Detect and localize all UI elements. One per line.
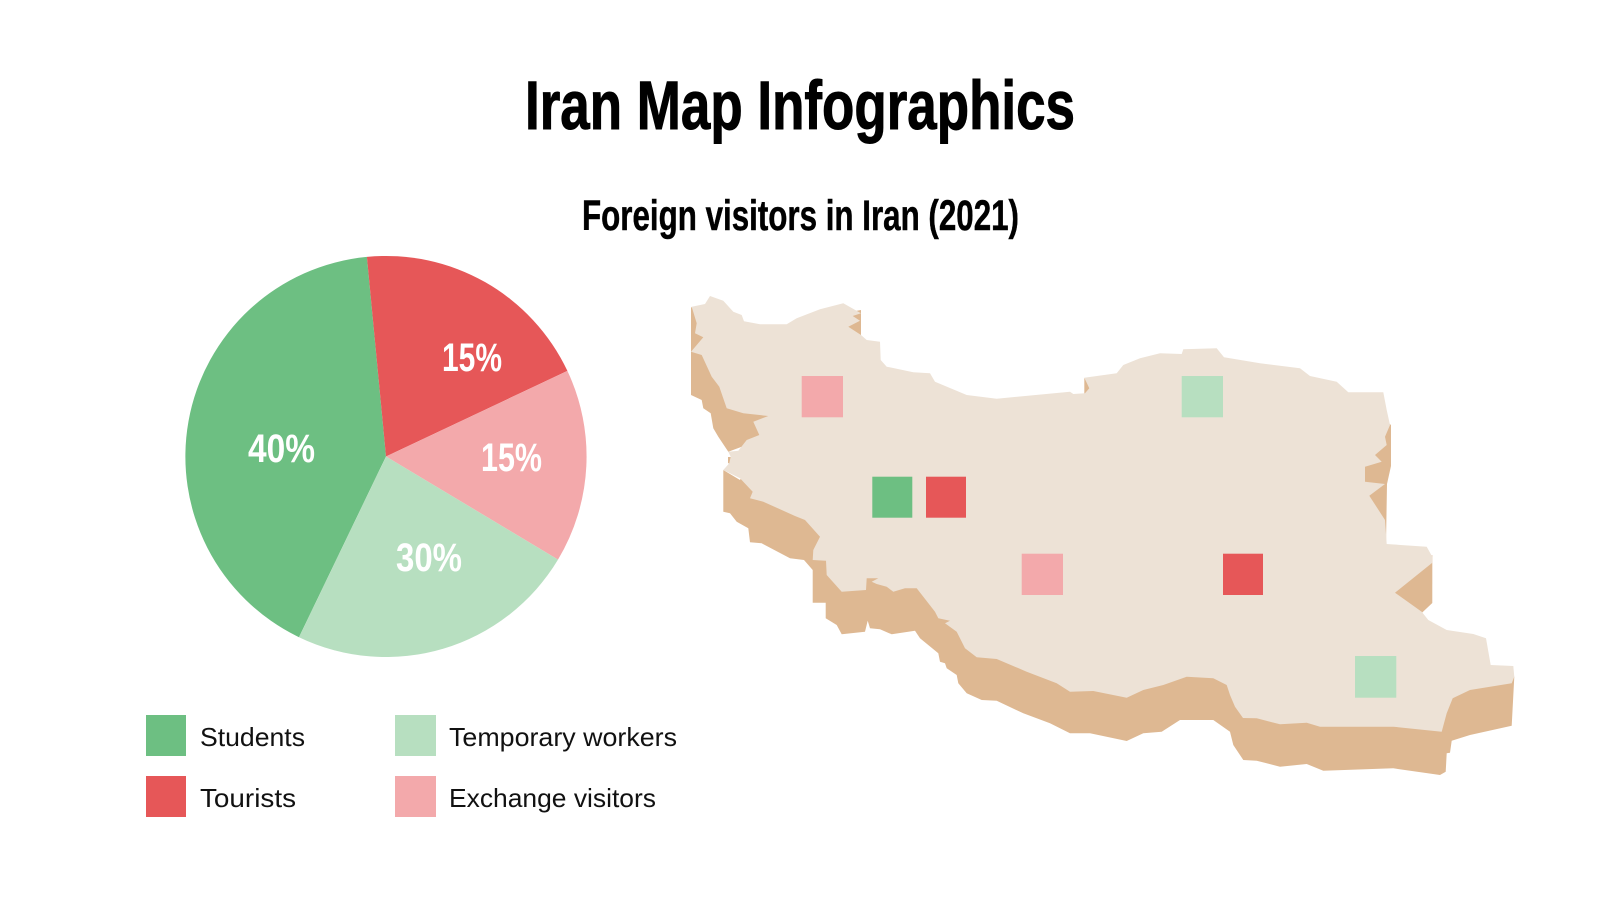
marker: temporary workers north — [1182, 376, 1223, 417]
marker: tourists east — [1223, 554, 1263, 595]
legend — [146, 715, 677, 817]
label: 40%: 40% — [248, 427, 315, 471]
label: 15% exchange: 15% — [481, 436, 542, 480]
marker: temporary workers southeast — [1355, 656, 1396, 698]
map: extruded base — [691, 307, 1514, 775]
slice: students 40% — [185, 257, 386, 637]
legend item: exchange visitors: Exchange visitors — [449, 783, 656, 813]
marker: tourists west — [926, 477, 966, 518]
legend item: students: Students — [200, 722, 305, 752]
slice: temporary workers 30% — [299, 456, 558, 657]
legend item: students — [146, 715, 305, 756]
legend item: exchange visitors — [395, 776, 656, 817]
map of Iran — [691, 296, 1514, 775]
label: 15% tourists: 15% — [442, 336, 502, 380]
legend item: tourists: Tourists — [200, 783, 296, 813]
pie chart — [185, 256, 587, 657]
subtitle: Foreign visitors in Iran (2021) — [582, 192, 1019, 240]
marker: exchange visitors center — [1022, 554, 1063, 595]
marker: students — [872, 477, 912, 518]
label: 30%: 30% — [396, 536, 462, 580]
legend item: temporary workers — [395, 715, 677, 756]
title: Iran Map Infographics — [525, 67, 1075, 144]
slice: exchange visitors 15% — [386, 371, 587, 560]
legend item: temporary workers: Temporary workers — [449, 722, 677, 752]
map: top surface — [691, 296, 1514, 732]
marker: exchange visitors northwest — [802, 376, 843, 417]
legend item: tourists — [146, 776, 296, 817]
slice: tourists 15% — [367, 256, 567, 456]
